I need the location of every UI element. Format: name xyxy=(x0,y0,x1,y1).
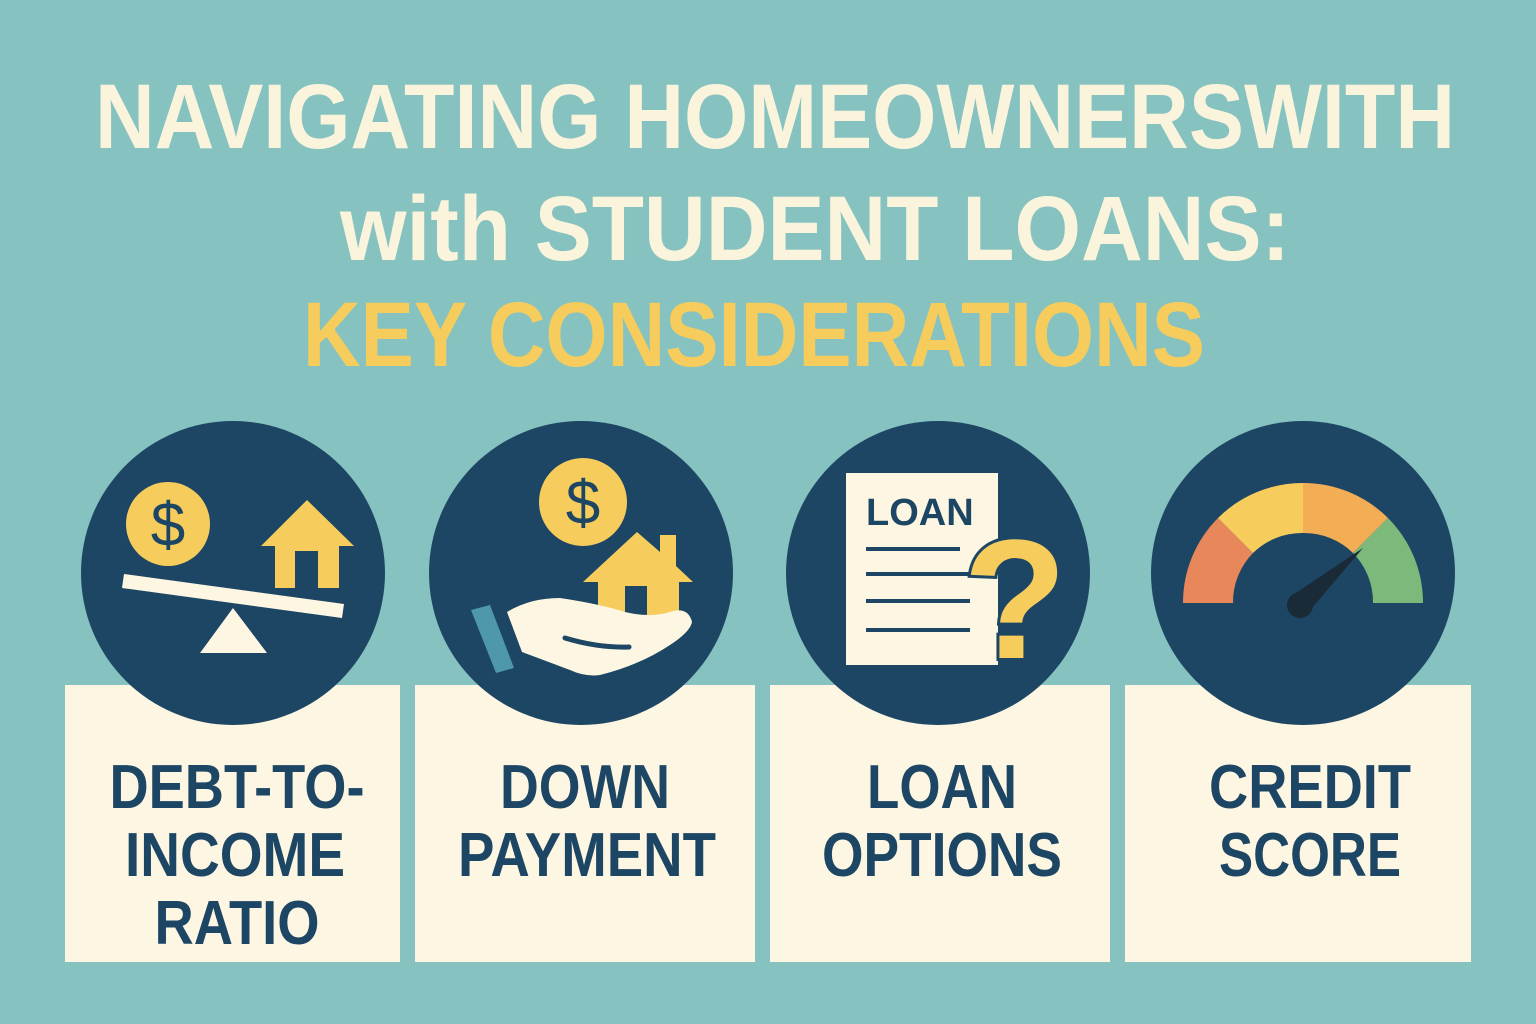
icon: loan document with question mark: ? xyxy=(963,505,1067,695)
card: credit score: SCORE xyxy=(1219,821,1401,890)
title: KEY CONSIDERATIONS xyxy=(303,284,1205,386)
card: debt-to-income: INCOME xyxy=(125,821,345,890)
card: debt-to-income: DEBT-TO- xyxy=(110,753,364,822)
icon: hand holding house: $ xyxy=(566,469,600,538)
card: loan options: LOAN xyxy=(867,753,1017,822)
card: down payment xyxy=(415,685,755,962)
card: down payment: PAYMENT xyxy=(458,821,716,890)
icon: credit score gauge xyxy=(1151,421,1455,725)
card: down payment: DOWN xyxy=(500,753,670,822)
title: with STUDENT LOANS: xyxy=(339,178,1290,280)
card: loan options: OPTIONS xyxy=(822,821,1062,890)
icon: balance scale xyxy=(81,421,385,725)
card: debt-to-income: RATIO xyxy=(154,889,320,958)
icon: loan document with question mark xyxy=(786,421,1090,725)
title xyxy=(95,66,1455,386)
icon: loan document with question mark: LOAN xyxy=(866,492,974,534)
icon: hand holding house xyxy=(429,421,733,725)
card: credit score: CREDIT xyxy=(1209,753,1411,822)
card: debt-to-income xyxy=(65,685,400,962)
card: credit score xyxy=(1125,685,1471,962)
icon: balance scale: $ xyxy=(151,491,185,560)
card: loan options xyxy=(770,685,1110,962)
